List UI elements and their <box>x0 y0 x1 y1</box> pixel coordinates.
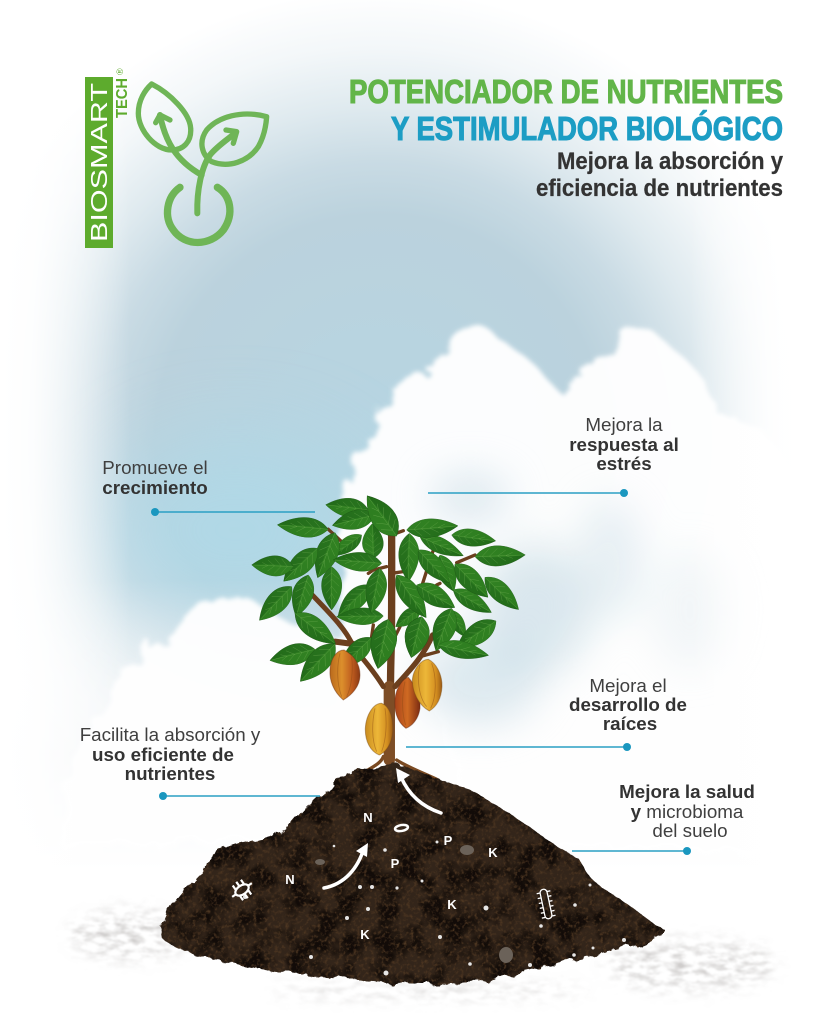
nutrient letters: K <box>360 927 370 942</box>
oxygen icon <box>395 824 408 832</box>
callout: raíces: desarrollo de <box>569 694 687 715</box>
logo wordmark <box>85 68 131 248</box>
callout: crecimiento: Promueve el <box>102 457 208 478</box>
callout: estrés: Mejora la <box>585 414 663 435</box>
ground dust shadow <box>70 911 775 996</box>
side fades <box>0 0 130 880</box>
callout: nutrientes <box>80 724 320 800</box>
callout: suelo: del suelo <box>652 820 728 841</box>
callout: estrés: estrés <box>596 453 652 474</box>
soil specks <box>243 840 626 976</box>
logo wordmark: TECH <box>114 78 131 118</box>
cacao pods <box>330 650 442 755</box>
roots and trunk <box>311 529 475 779</box>
nutrient letters: K <box>447 897 457 912</box>
nutrient letters: N <box>363 810 373 825</box>
logo <box>85 68 267 248</box>
subtitle: eficiencia de nutrientes <box>536 175 783 202</box>
cloud: lower left <box>60 596 480 850</box>
arrow: nutrients to root <box>396 768 441 813</box>
icon: bacteria <box>536 888 556 920</box>
callout: raíces: Mejora el <box>589 675 667 696</box>
nutrient letters: K <box>488 845 498 860</box>
nutrient letters: N <box>285 872 295 887</box>
callout: suelo: Mejora la salud <box>619 781 755 802</box>
callout: suelo: y microbioma <box>631 801 744 822</box>
foliage <box>251 489 526 689</box>
callout: suelo <box>572 781 755 855</box>
callout: crecimiento <box>102 457 315 516</box>
subtitle <box>536 148 784 202</box>
logo wordmark: ® <box>115 68 125 75</box>
subtitle: Mejora la absorción y <box>557 148 784 175</box>
callout: crecimiento: crecimiento <box>102 477 208 498</box>
nutrient letters: P <box>444 833 453 848</box>
arrow: nutrients upward left <box>324 843 368 888</box>
nutrient letters: P <box>391 856 400 871</box>
logo icon: sprout <box>138 84 267 242</box>
soil mound <box>160 765 665 984</box>
title <box>349 73 783 147</box>
cloud shading <box>420 475 730 725</box>
nutrient letters <box>285 810 498 942</box>
callout: nutrientes: Facilita la absorción y <box>80 724 261 745</box>
callout: raíces <box>406 675 687 751</box>
callout: nutrientes: nutrientes <box>125 763 215 784</box>
icon: soil microbe <box>226 875 258 905</box>
callout: estrés: respuesta al <box>569 434 679 455</box>
callout: raíces: raíces <box>603 713 657 734</box>
stones <box>315 845 513 963</box>
callout: nutrientes: uso eficiente de <box>92 744 234 765</box>
cloud: upper right <box>330 325 819 850</box>
logo wordmark: BIOSMART <box>86 83 112 242</box>
callout: estrés <box>428 414 679 497</box>
cacao plant <box>251 489 526 779</box>
